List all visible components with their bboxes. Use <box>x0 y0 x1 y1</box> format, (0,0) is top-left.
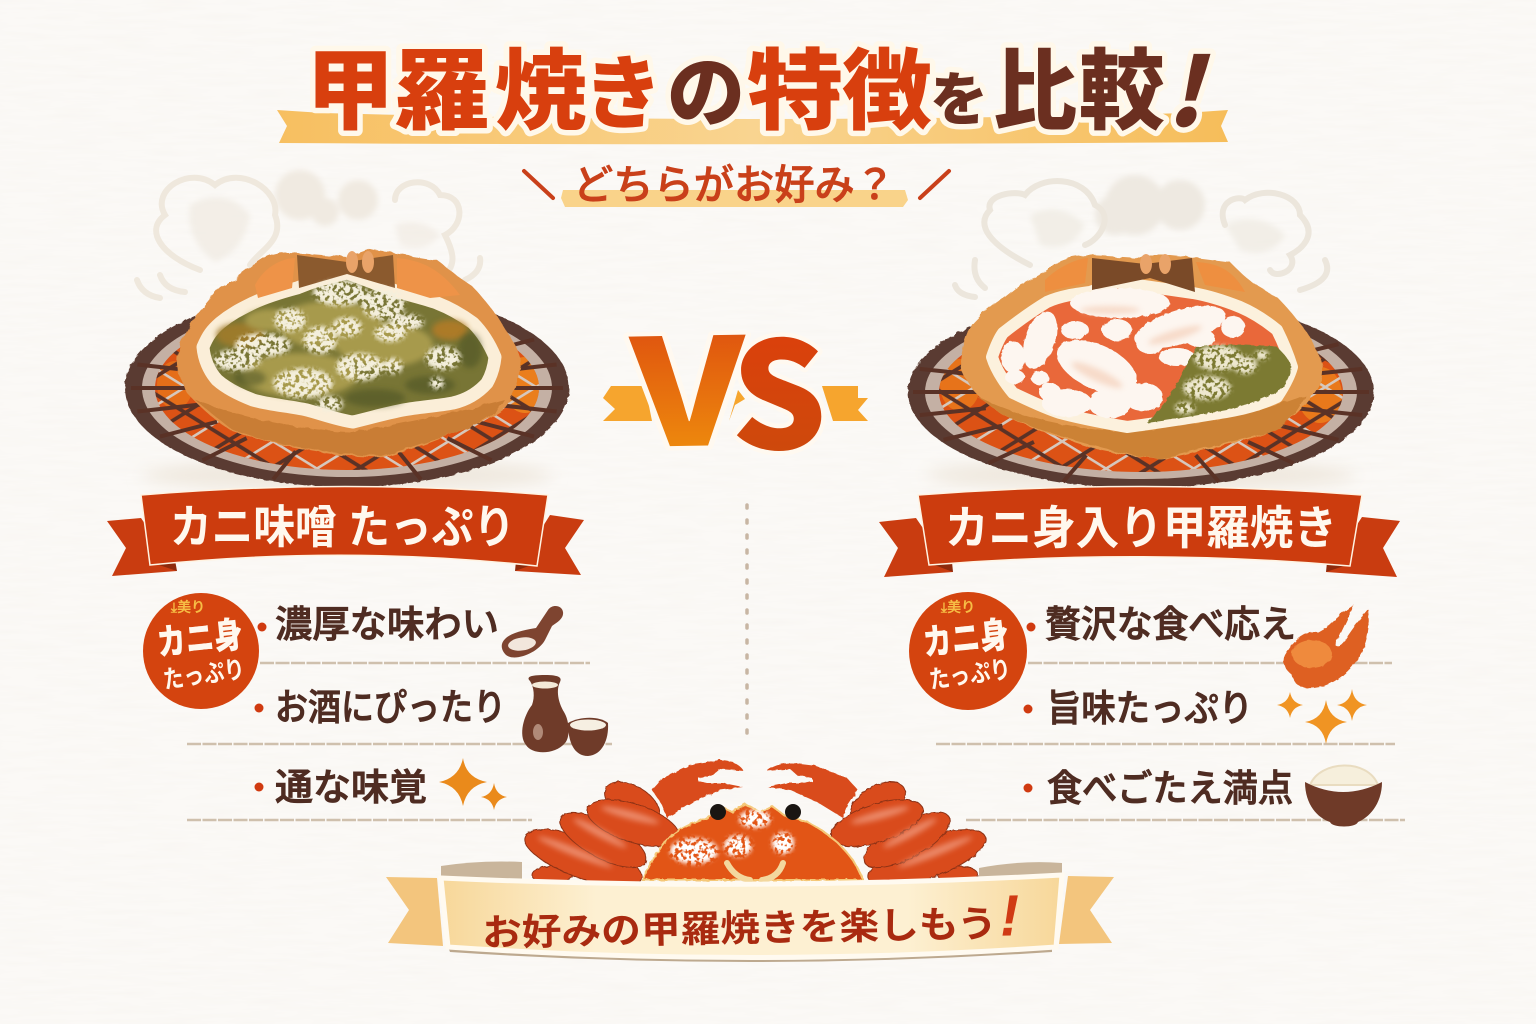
infographic canvas <box>107 41 1405 962</box>
name ribbon left <box>107 486 584 576</box>
notch between shell horns <box>1092 258 1195 292</box>
list left <box>143 593 612 820</box>
badge <box>143 593 259 709</box>
subtitle text: どちらがお好み？ <box>573 162 895 208</box>
icon: sparkles <box>439 758 507 810</box>
banner back folds <box>441 862 1062 881</box>
badge: ⤓美り <box>940 599 975 615</box>
leg highlights <box>536 803 974 871</box>
left steam blobs <box>189 170 440 262</box>
icon: wooden spoon <box>502 606 563 657</box>
ribbon tails <box>879 517 1400 577</box>
accent slashes <box>524 171 949 198</box>
crab shell: crab meat <box>960 254 1323 459</box>
right steam outlines <box>955 181 1327 297</box>
ribbon tail folds <box>150 560 537 571</box>
list right <box>909 592 1405 826</box>
cream rim and miso <box>203 273 495 422</box>
banner text <box>481 883 1020 958</box>
orange shoulders <box>1045 258 1245 292</box>
grill light ring <box>925 305 1357 479</box>
steam right <box>955 175 1327 297</box>
cream rim and filling <box>992 282 1292 427</box>
VS letters: S <box>731 277 827 492</box>
crab legs left <box>518 773 685 898</box>
miso topping <box>1175 345 1269 414</box>
title text: き <box>583 50 663 139</box>
crab shell: miso <box>177 250 521 457</box>
subtitle highlight <box>561 190 908 207</box>
miso blotches <box>216 301 468 397</box>
badge: ⤓美り <box>170 599 205 615</box>
VS side ribbon left <box>603 386 652 421</box>
miso portion <box>1147 345 1291 423</box>
crab mouth <box>727 863 783 880</box>
steam left <box>137 170 480 298</box>
shadow <box>926 459 1356 491</box>
title text: 比 <box>993 42 1077 141</box>
VS emblem <box>603 273 868 492</box>
VS shard <box>729 390 745 421</box>
row dividers <box>936 663 1405 820</box>
miso dark patches <box>234 332 482 407</box>
banner text: お好みの甲羅焼きを楽しもう <box>482 904 997 954</box>
crab body salt <box>670 810 794 864</box>
banner text: ! <box>999 883 1020 949</box>
badge: カニ身 <box>921 614 1011 663</box>
grill rim <box>908 296 1374 488</box>
crab meat chunks <box>1001 288 1245 418</box>
item 3: 通な味覚 <box>275 767 427 808</box>
item 2: お酒にぴったり <box>275 687 506 728</box>
banner tails <box>386 876 1114 946</box>
crab meat shading <box>1069 306 1203 392</box>
grill left <box>124 314 570 490</box>
crab eyes <box>710 804 801 820</box>
shell horns <box>1140 254 1171 274</box>
ribbon text: カニ身入り甲羅焼き <box>945 502 1337 554</box>
breadcrumb topping <box>213 280 461 412</box>
left steam outlines <box>137 178 480 298</box>
orange shoulders <box>255 258 460 298</box>
bottom banner <box>386 862 1114 962</box>
shadow <box>142 459 552 491</box>
center dotted divider <box>745 505 749 735</box>
title text: 甲 <box>306 42 394 141</box>
grill rods <box>131 339 563 479</box>
shell outer <box>960 255 1323 459</box>
bullets <box>1024 622 1036 792</box>
ribbon tail folds <box>929 562 1350 572</box>
crab illustration <box>518 760 992 898</box>
lower crust shading <box>975 395 1305 459</box>
right steam blobs <box>1030 175 1285 253</box>
lower crust shading <box>195 400 505 455</box>
title text: の <box>667 49 745 137</box>
grill coals <box>939 353 1343 472</box>
title ribbon <box>277 110 1228 144</box>
title text <box>306 18 1211 154</box>
item 1: 濃厚な味わい <box>275 604 499 645</box>
grill rim <box>125 289 569 487</box>
title text: 徴 <box>842 42 932 141</box>
icon: rice bowl <box>1305 765 1382 826</box>
item 2: 旨味たっぷり <box>1047 688 1253 729</box>
grill light ring <box>142 299 552 477</box>
shell outer <box>177 250 521 457</box>
grill right <box>907 320 1374 490</box>
item 1: 贅沢な食べ応え <box>1045 604 1296 645</box>
subtitle <box>524 162 949 208</box>
ribbon text: カニ味噌 たっぷり <box>170 501 515 553</box>
grill rods <box>913 344 1369 482</box>
badge: たっぷり <box>161 655 247 695</box>
title text: 較 <box>1079 42 1165 141</box>
crab claws <box>652 760 858 818</box>
VS letters: V <box>627 273 749 490</box>
item 3: 食べごたえ満点 <box>1047 768 1293 809</box>
icon: crab claw <box>1284 605 1369 688</box>
ribbon tails <box>107 515 584 576</box>
ribbon band <box>918 486 1362 566</box>
notch between shell horns <box>297 255 395 288</box>
badge: たっぷり <box>927 655 1013 695</box>
title <box>277 18 1228 154</box>
badge: カニ身 <box>155 614 245 663</box>
title text: ! <box>1165 18 1211 154</box>
VS side ribbon right <box>822 386 868 421</box>
title text: 焼 <box>495 42 587 141</box>
banner shadow <box>447 944 1052 962</box>
VS letters <box>627 273 827 492</box>
title text: を <box>930 68 988 133</box>
grill coals <box>155 348 539 470</box>
ribbon band <box>141 486 548 566</box>
name ribbon right <box>879 486 1400 577</box>
banner body <box>441 875 1062 958</box>
bullets <box>254 622 266 792</box>
badge <box>909 592 1027 710</box>
crab body <box>643 804 863 880</box>
row dividers <box>187 663 612 820</box>
icon: three sparkles <box>1277 689 1367 744</box>
title text: 特 <box>747 42 843 141</box>
crab legs right <box>825 773 992 898</box>
shell horns <box>346 251 374 273</box>
icon: sake flask and cup <box>522 675 608 756</box>
title text: 羅 <box>394 42 490 141</box>
